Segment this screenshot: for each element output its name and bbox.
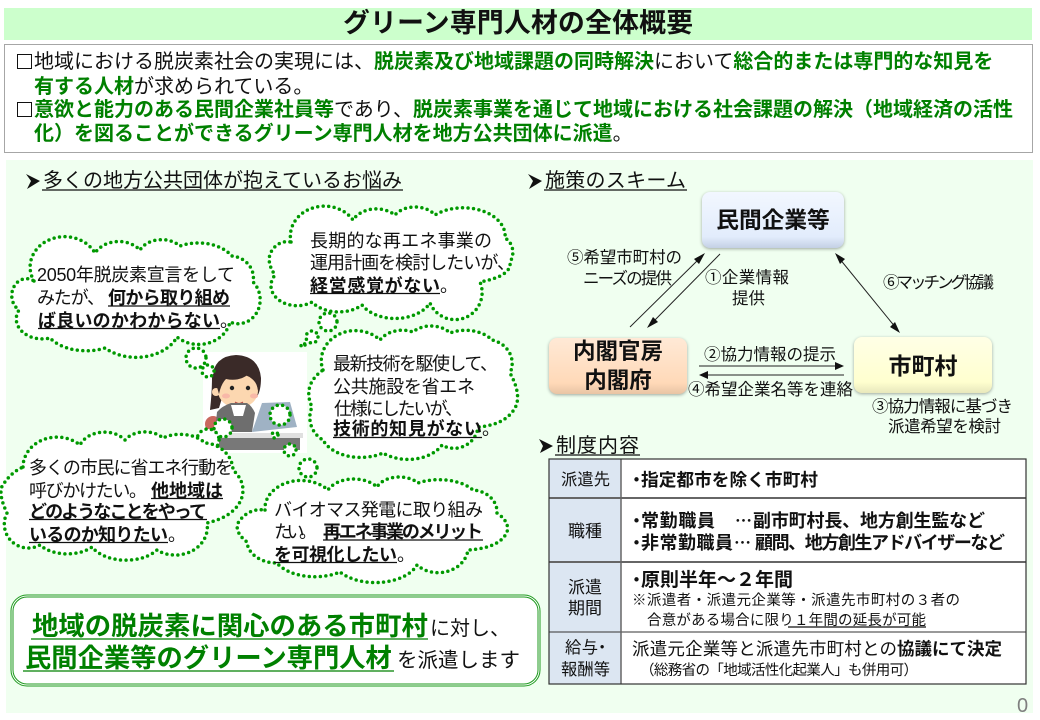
callout bubble: latest technology: 仕様にしたいが、 [334,399,463,419]
text line 1: 地域における脱炭素社会の実現には、脱炭素及び地域課題の同時解決において総合的または専門的な知見を [34,50,993,73]
callout bubble: citizen energy saving: 多くの市民に省エネ行動を [29,458,233,478]
callout bubble: biomass: たい。 [274,522,317,542]
row: salary: 協議にて決定 [897,639,1002,659]
callout bubble: long-term plan: 長期的な再エネ事業の [310,231,492,251]
callout bubble: long-term plan: 。 [440,276,458,296]
row: destination: 派遣先 [561,471,610,489]
row: salary: 給与 [565,639,598,657]
callout bubble: citizen energy saving: いるのか知りたい [29,525,168,545]
callout bubble: latest technology [309,326,518,459]
arrow: step 5 to companies [630,253,705,327]
arrow: step 2 right [699,362,844,370]
row: dispatch period: 合意がある場合に限り１年間の延長が可能 [647,612,926,629]
callout bubble: biomass: を可視化したい [274,545,397,565]
callout bubble: latest technology: 公共施設を省エネ [333,377,475,397]
row: salary: 派遣元企業等と派遣先市町村との [632,639,897,659]
text line 3: 意欲と能力のある民間企業社員等であり、脱炭素事業を通じて地域における社会課題の解決（地域経済の活性 [34,98,1013,121]
callout bubble: 2050 declaration: ば良いのかわからない [38,311,220,331]
title band: グリーン専門人材の全体概要 [343,7,693,38]
label: step 5: ニーズの提供 [583,269,672,288]
thought bubble dots [186,313,337,477]
row: job type: 顧問、地方創生アドバイザーなど [755,532,1005,553]
label: step 3: ③協力情報に基づき [872,397,1013,416]
text line 4: 化）を図ることができるグリーン専門人材を地方公共団体に派遣。 [34,121,633,145]
label: step 5 [567,248,682,288]
box: municipalities: 市町村 [888,353,958,379]
callout bubble: citizen energy saving: 他地域は [151,481,223,501]
panel: summary text [4,44,1032,152]
row: job type [568,507,1005,554]
callout bubble: long-term plan: 経営感覚がない [310,275,440,296]
row: dispatch period: 期間 [568,599,602,618]
row: job type: 常勤職員 [641,511,715,531]
callout bubble: 2050 declaration: 。 [220,311,238,331]
row: dispatch period: 原則半年～２年間 [641,568,793,591]
callout bubble: citizen energy saving [1,432,243,560]
arrow: step 6 matching [835,253,900,333]
box: cabinet office: 内閣官房 [573,339,663,364]
row: job type: 副市町村長、地方創生監など [753,510,985,531]
row: dispatch period: ※派遣者・派遣元企業等・派遣先市町村の３者の [632,591,960,609]
row: destination: ・ [628,471,645,490]
row: job type: … [735,507,752,532]
callout bubble: citizen energy saving: 。 [168,525,186,545]
row: salary [561,639,1002,679]
box: cabinet office [549,338,687,394]
heading: worries: 多くの地方公共団体が抱えているお悩み [43,169,402,192]
heading: program details: 制度内容 [556,434,639,457]
callout bubble: citizen energy saving: どのようなことをやって [29,502,207,522]
callout bubble: 2050 declaration: みたが、 [37,288,105,308]
panel: lower background [6,160,1033,713]
callout bubble: biomass: 再エネ事業のメリット [323,522,483,542]
callout: dispatch summary: 地域の脱炭素に関心のある市町村 [32,611,428,641]
label: step 2: ②協力情報の提示 [704,345,836,364]
row: job type: ・ [628,512,645,531]
label: step 1: 提供 [732,289,765,308]
row: dispatch period: ・ [628,571,645,590]
row: salary: （総務省の「地域活性化起業人」も併用可） [640,662,918,679]
callout bubble: biomass: 。 [397,545,415,565]
callout bubble: long-term plan: 運用計画を検討したいが、 [310,253,515,273]
callout bubble: biomass: バイオマス発電に取り組み [274,500,483,520]
box: private companies: 民間企業等 [716,207,830,233]
heading: scheme: 施策のスキーム [545,169,686,192]
box: cabinet office: 内閣府 [584,368,652,393]
row: job type: 非常勤職員 [641,533,733,553]
label: step 4: ④希望企業名等を連絡 [688,380,854,399]
row: dispatch period [568,568,960,629]
arrow: step 1 to cabinet office [647,254,720,328]
callout: dispatch summary: に対し、 [430,617,510,640]
callout bubble: 2050 declaration: 2050年脱炭素宣言をして [37,265,235,285]
callout bubble: 2050 declaration: 何から取り組め [108,288,230,308]
label: step 6: ⑥マッチング協議 [883,273,994,292]
callout bubble: 2050 declaration [12,237,260,357]
row: job type: … [734,529,751,554]
title band [4,7,1032,40]
callout: dispatch summary: 民間企業等のグリーン専門人材 [25,643,392,673]
callout: dispatch summary: を派遣します [397,649,520,672]
text line 2: 有する人材が求められている。 [34,75,313,98]
row: dispatch period: 派遣 [568,578,602,597]
callout bubble: long-term plan [269,206,515,320]
checkbox 2 [18,102,32,116]
box: private companies [702,192,844,248]
row: job type: 職種 [568,522,602,541]
callout bubble: latest technology: 最新技術を駆使して、 [333,354,498,374]
row: destination: 指定都市を除く市町村 [641,470,818,490]
callout bubble: latest technology: 。 [482,419,500,439]
callout bubble: biomass [237,477,508,583]
label: step 1: ①企業情報 [705,268,790,287]
label: step 3 [872,397,1013,436]
page number: 0 [1017,695,1028,717]
box: municipalities [854,337,992,393]
row: destination [561,470,818,490]
callout bubble: latest technology: 技術的知見がない [333,418,482,439]
arrow: step 4 left [699,371,844,379]
label: step 1 [705,268,790,308]
checkbox 1 [18,54,32,68]
label: step 3: 派遣希望を検討 [888,417,1001,436]
label: step 5: ⑤希望市町村の [567,248,682,267]
row: salary: 報酬等 [561,661,610,679]
icon: office worker at laptop [203,352,307,453]
callout bubble: citizen energy saving: 呼びかけたい。 [29,481,147,501]
row: job type: ・ [628,534,645,553]
table: program details [549,459,1026,684]
row: salary: ・ [594,639,610,657]
callout: dispatch summary [11,595,540,686]
